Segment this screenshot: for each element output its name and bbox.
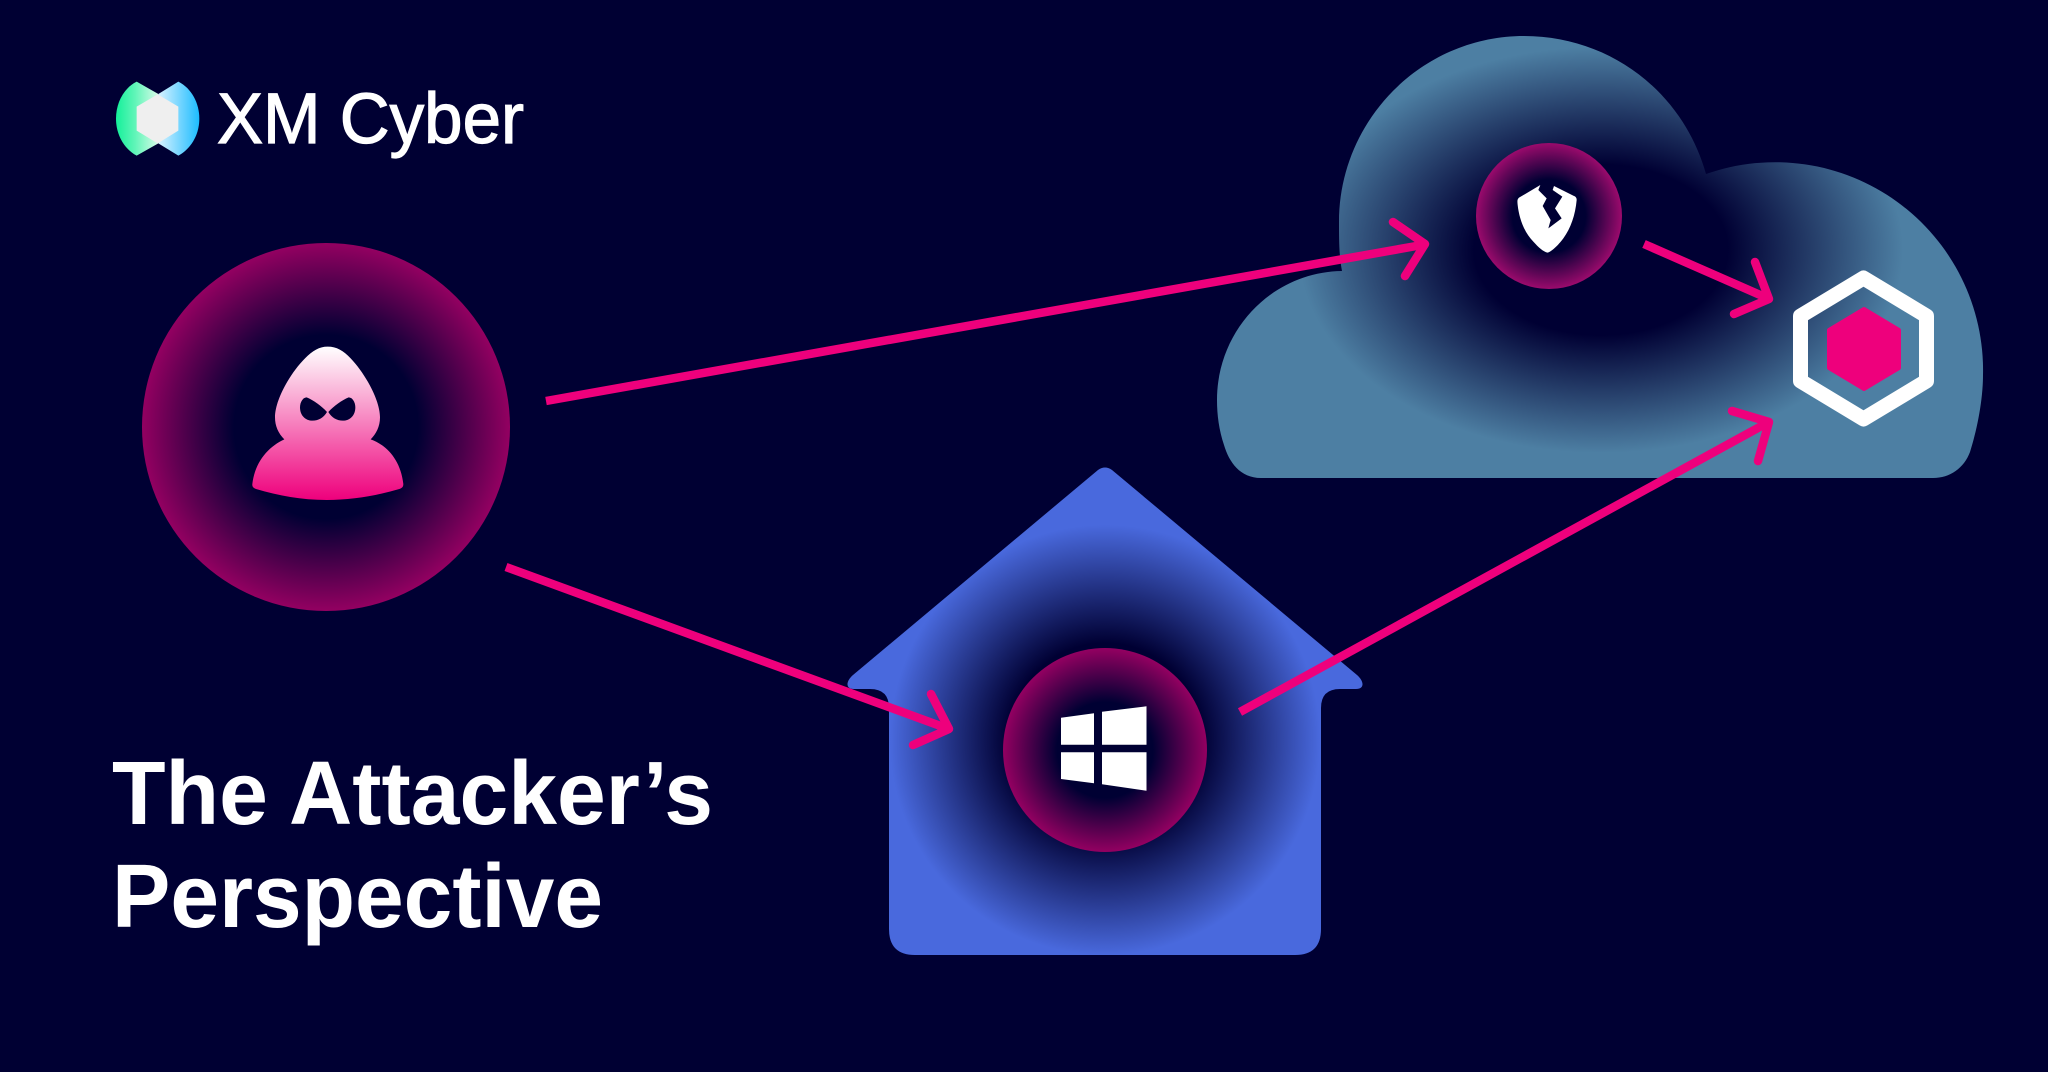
attacker circle <box>142 243 510 611</box>
icon: target hexagon <box>1800 278 1926 419</box>
logo: XM Cyber <box>116 80 524 159</box>
panel: cloud <box>1217 36 1983 478</box>
house shape <box>848 468 1362 955</box>
windows circle <box>1003 648 1207 852</box>
icon: windows logo <box>1061 706 1146 791</box>
title: The Attacker’s <box>112 744 713 844</box>
icon: hooded attacker <box>252 347 403 500</box>
logo wordmark: XM Cyber <box>217 80 524 159</box>
panel: house <box>848 468 1362 955</box>
arrow: house to target <box>1240 411 1769 712</box>
title: Perspective <box>112 847 603 947</box>
shield circle <box>1476 143 1622 289</box>
icon: broken shield <box>1517 185 1577 253</box>
arrow: attacker to house <box>506 567 949 745</box>
icon: logo mark <box>116 82 199 156</box>
title <box>112 744 713 947</box>
arrow: shield to target <box>1644 244 1769 314</box>
panel: attacker <box>142 243 510 611</box>
arrow: attacker to cloud <box>546 222 1425 401</box>
cloud shape <box>1217 36 1983 478</box>
